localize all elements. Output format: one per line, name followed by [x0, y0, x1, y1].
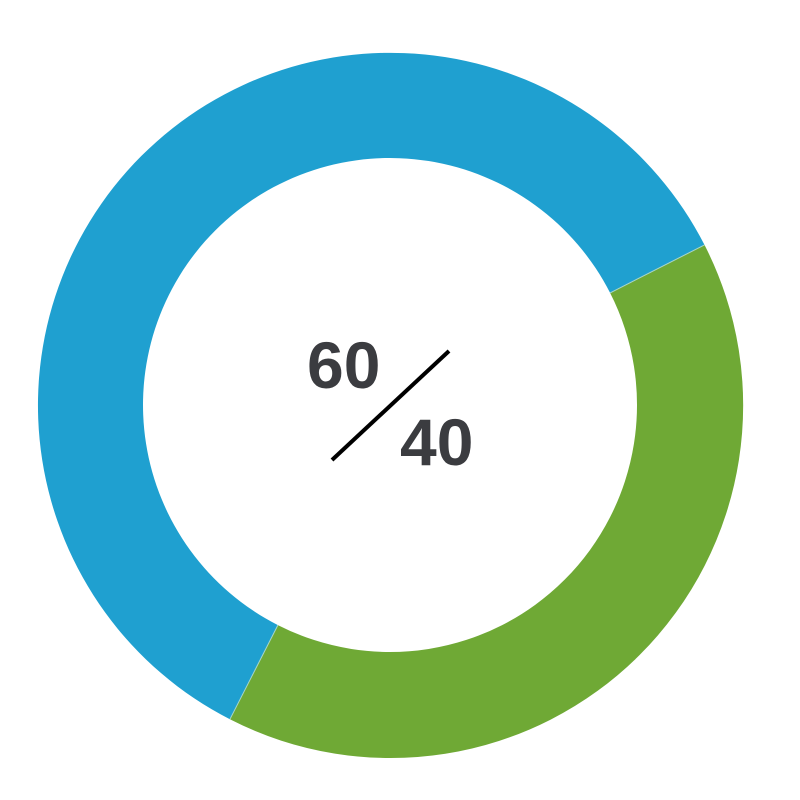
value: 60: 60 [307, 328, 380, 402]
value: 40: 40 [400, 405, 473, 479]
center label: 60 / 40 [307, 328, 473, 479]
divider slash [332, 351, 449, 460]
segment: blue 60% [38, 53, 704, 719]
segment: green 40% [230, 245, 743, 758]
seam: segment boundaries [230, 245, 704, 719]
